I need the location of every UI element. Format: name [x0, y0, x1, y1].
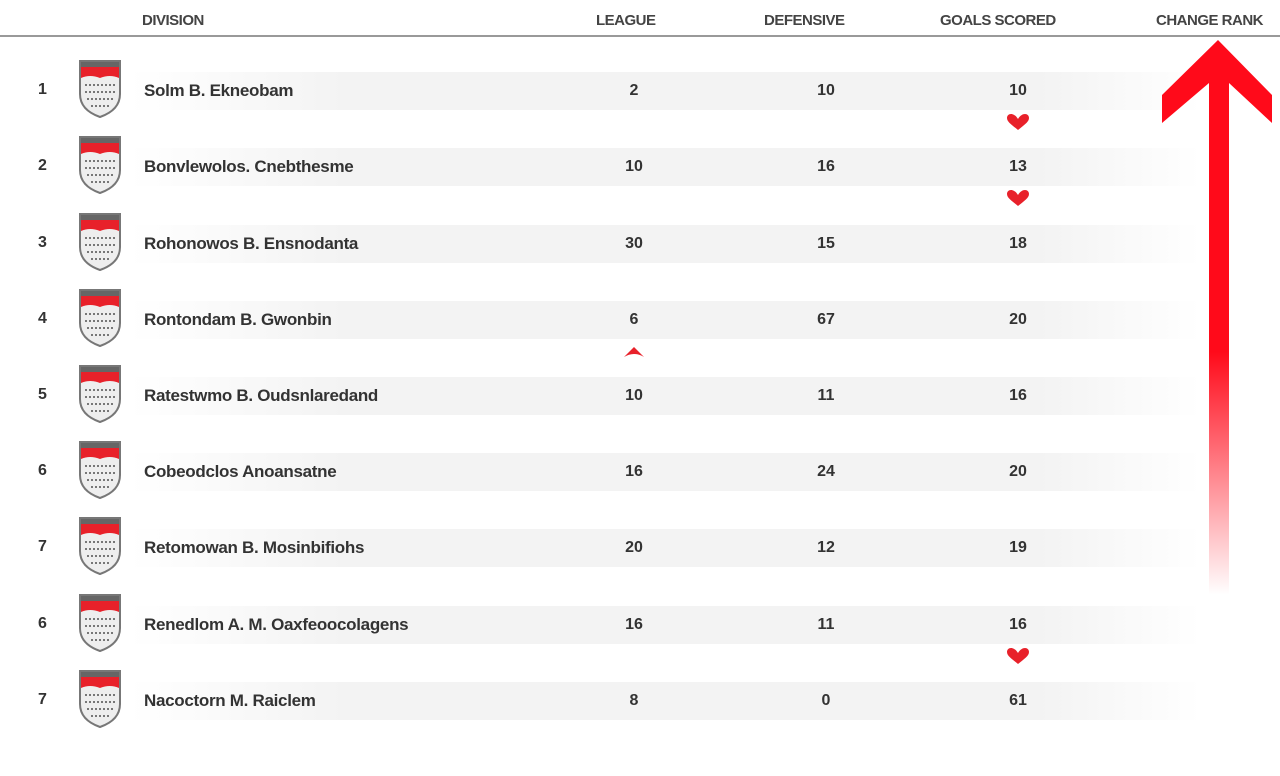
row 2 [38, 136, 1092, 206]
row 9: Nacoctorn M. Raiclem [144, 691, 316, 710]
row 3: Rohonowos B. Ensnodanta [144, 234, 358, 253]
table rows: 2 [38, 157, 47, 174]
row 9 [38, 670, 1092, 728]
row 1: 2 [630, 82, 638, 99]
header: change: CHANGE RANK [1156, 12, 1263, 29]
row 2: 16 [817, 158, 835, 175]
table rows: 4 [38, 310, 47, 327]
row 5 [38, 365, 1092, 423]
header: division: DIVISION [142, 12, 204, 29]
table rows: 6 [38, 462, 47, 479]
row 7: 19 [1009, 539, 1027, 556]
row 4: Rontondam B. Gwonbin [144, 310, 332, 329]
row 7: Retomowan B. Mosinbifiohs [144, 538, 364, 557]
row 6: 20 [1009, 463, 1027, 480]
row 4 [38, 289, 1092, 357]
row 8: 11 [818, 616, 834, 633]
arrow: rising rank [1162, 40, 1272, 587]
row 6: Cobeodclos Anoansatne [144, 462, 336, 481]
row 3: 15 [817, 235, 835, 252]
row 1 [38, 60, 1092, 130]
header row [142, 12, 1264, 29]
row 1: 10 [817, 82, 835, 99]
row 8: 16 [1009, 616, 1027, 633]
header: points: DEFENSIVE [764, 12, 845, 29]
row 1: 10 [1009, 82, 1027, 99]
row 8: 16 [625, 616, 643, 633]
row 3: 18 [1009, 235, 1027, 252]
row 7: 20 [625, 539, 643, 556]
row 4: 6 [630, 311, 638, 328]
row 5: 16 [1009, 387, 1027, 404]
row 5: 11 [818, 387, 834, 404]
row 9: 0 [822, 692, 830, 709]
row 7: 12 [817, 539, 835, 556]
row 9: 61 [1009, 692, 1027, 709]
row 6 [38, 441, 1092, 499]
table rows: 6 [38, 615, 47, 632]
row 5: 10 [625, 387, 643, 404]
row 5: Ratestwmo B. Oudsnlaredand [144, 386, 378, 405]
row 2: Bonvlewolos. Cnebthesme [144, 157, 353, 176]
row 7 [38, 517, 1092, 575]
header: leagues: LEAGUE [596, 12, 656, 29]
row 3 [38, 213, 1092, 271]
header: goals: GOALS SCORED [940, 12, 1056, 29]
row 4: 67 [817, 311, 835, 328]
row 1: Solm B. Ekneobam [144, 81, 293, 100]
icon: shield [79, 60, 121, 118]
row 9: 8 [630, 692, 638, 709]
row 2: 13 [1009, 158, 1027, 175]
table rows: 1 [38, 81, 47, 98]
table rows: 7 [38, 691, 47, 708]
table rows: 3 [38, 234, 47, 251]
row 8: Renedlom A. M. Oaxfeoocolagens [144, 615, 408, 634]
row 6: 16 [625, 463, 643, 480]
table rows: 7 [38, 538, 47, 555]
table rows: 5 [38, 386, 47, 403]
row 6: 24 [817, 463, 835, 480]
row 2: 10 [625, 158, 643, 175]
row 4: 20 [1009, 311, 1027, 328]
row 3: 30 [625, 235, 643, 252]
row 8 [38, 594, 1092, 664]
